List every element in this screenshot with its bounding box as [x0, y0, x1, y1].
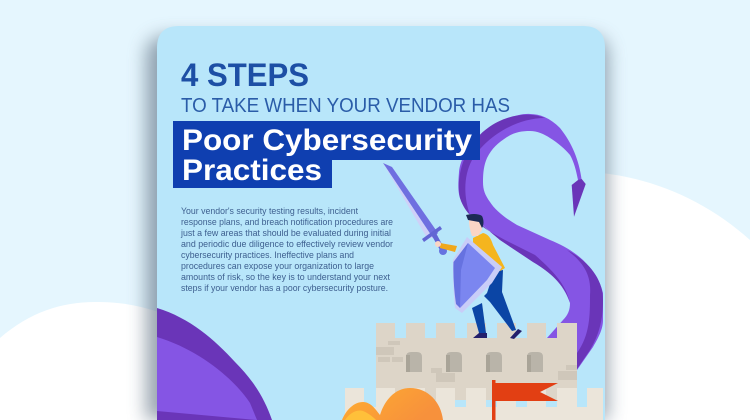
highlighted heading [173, 121, 480, 188]
intro paragraph [180, 206, 393, 293]
flag [492, 380, 558, 420]
background hills [0, 172, 750, 420]
castle front wall [345, 388, 603, 420]
knight [383, 163, 522, 339]
title: 4 steps: 4 STEPS [181, 57, 309, 93]
shoes [473, 329, 522, 339]
intro paragraph: just a few areas that should be evaluated during initial [180, 228, 391, 238]
windows [406, 352, 543, 372]
card shadow [146, 36, 608, 420]
intro paragraph: procedures can expose your organization to large [181, 261, 374, 271]
subtitle: TO TAKE WHEN YOUR VENDOR HAS [181, 95, 510, 117]
dragon wing [157, 308, 272, 420]
torso and arm [473, 233, 505, 271]
legs [484, 270, 516, 331]
flame [342, 388, 443, 420]
intro paragraph: amounts of risk, so the key is to understand your next [181, 272, 390, 282]
intro paragraph: and periodic due diligence to effectively review vendor [181, 239, 393, 249]
intro paragraph: response plans, and breach notification procedures are [181, 217, 393, 227]
head [469, 220, 482, 236]
tail tip [572, 179, 586, 217]
intro paragraph: Your vendor's security testing results, incident [181, 206, 358, 216]
highlighted heading: Practices [182, 154, 322, 187]
shield [453, 237, 502, 313]
intro paragraph: cybersecurity practices. Ineffective plans and [181, 250, 354, 260]
card panel [157, 26, 605, 420]
bricks [376, 341, 577, 382]
castle back wall [376, 323, 577, 400]
intro paragraph: steps if your vendor has a poor cybersecurity posture. [181, 283, 388, 293]
highlighted heading: Poor Cybersecurity [182, 124, 472, 157]
dragon tail [458, 114, 603, 370]
sword [383, 163, 447, 255]
